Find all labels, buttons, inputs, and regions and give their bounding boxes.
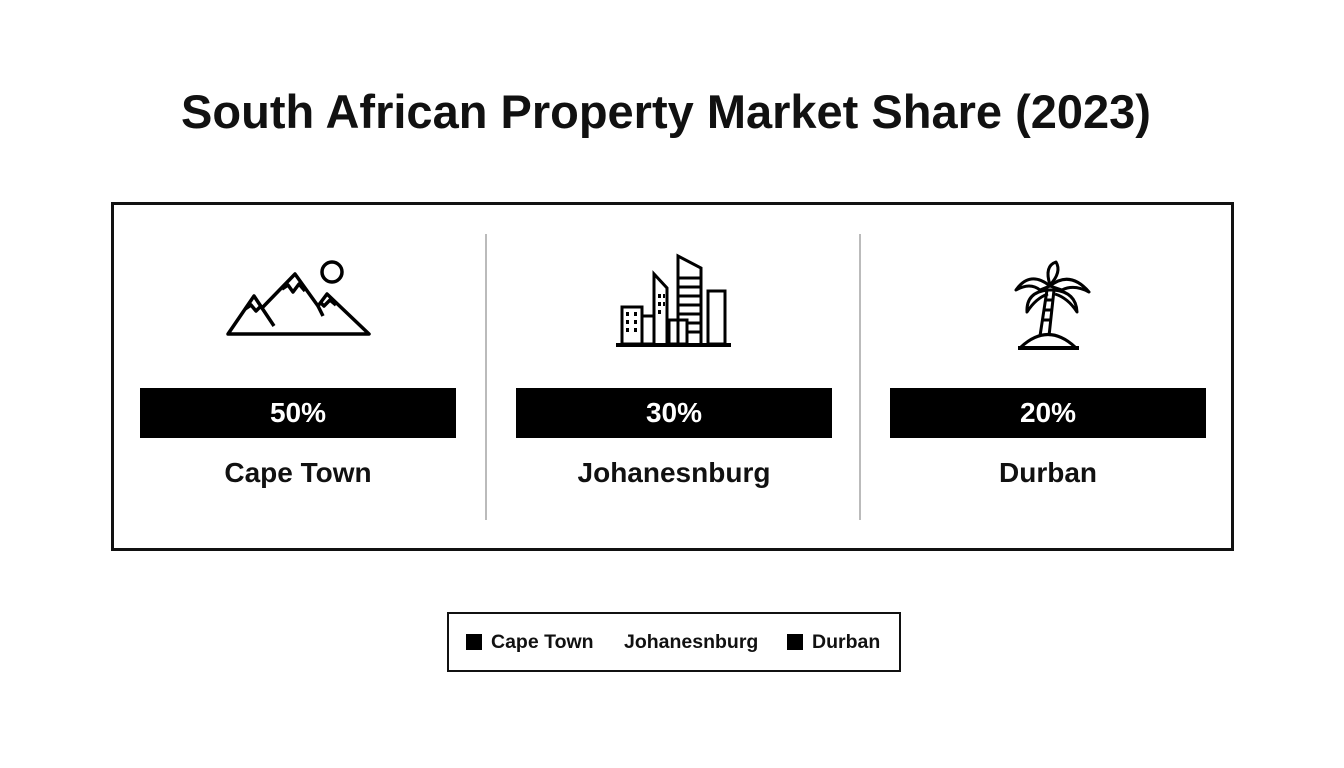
legend item: Johanesnburg: Johanesnburg [624,631,758,653]
label: Cape Town: Cape Town [224,457,372,488]
bar: Johannesburg 30%: 30% [646,397,702,428]
bar: Durban 20% [890,388,1206,438]
icon: palm tree [1014,260,1091,350]
icon: mountains [226,260,371,336]
title: South African Property Market Share (2023) [181,85,1151,138]
panel: market share box [111,202,1234,551]
icon: city buildings [616,254,731,347]
legend [447,612,901,672]
legend item: Durban: Durban [812,631,880,653]
label: Durban: Durban [999,457,1097,488]
label: Johannesburg: Johanesnburg [578,457,770,488]
bar: Johannesburg 30% [516,388,832,438]
bar: Cape Town 50% [140,388,456,438]
bar: Durban 20%: 20% [1020,397,1076,428]
bar: Cape Town 50%: 50% [270,397,326,428]
legend item: Cape Town: Cape Town [491,631,594,653]
